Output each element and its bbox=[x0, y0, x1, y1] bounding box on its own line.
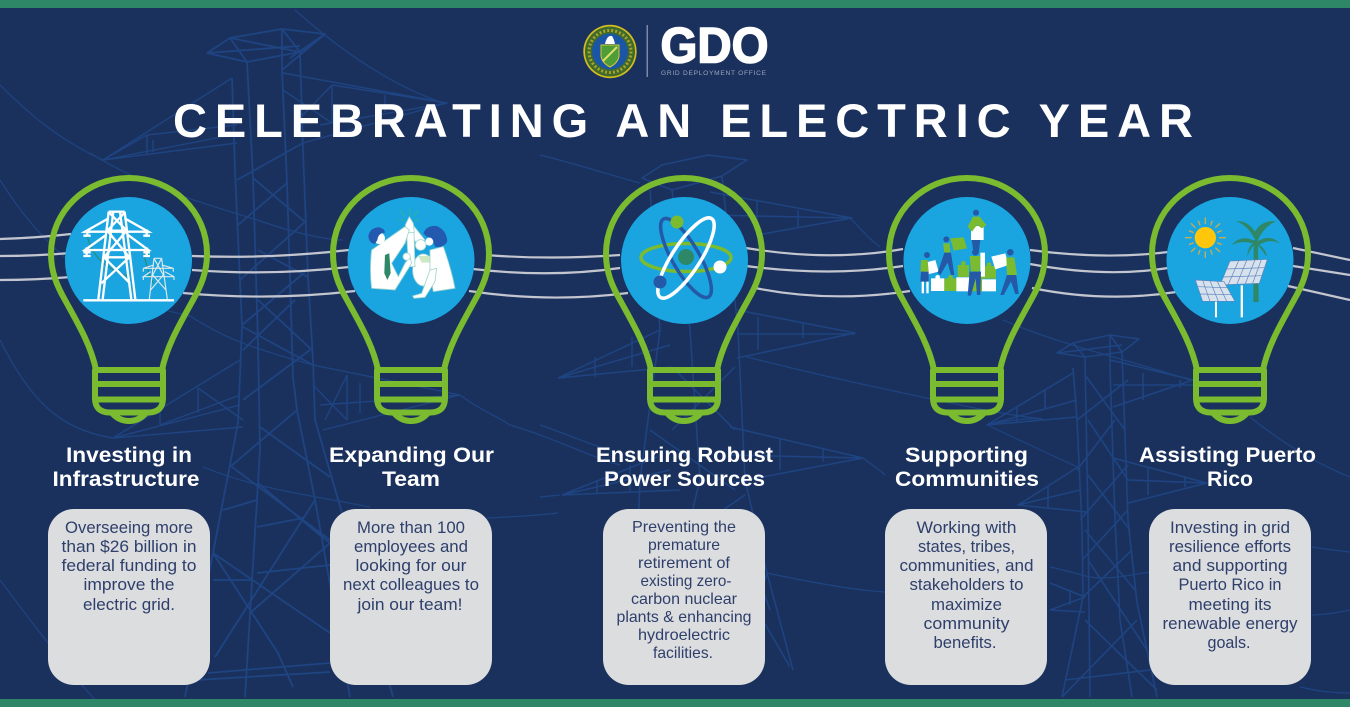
tower 1 bbox=[207, 29, 325, 62]
icon: sun, palm and solar panels bbox=[1166, 197, 1294, 324]
text card: communities, and bbox=[900, 557, 1034, 575]
text card: existing zero- bbox=[640, 573, 732, 590]
panel: ensuring robust power sources bbox=[596, 178, 773, 685]
text card: looking for our bbox=[356, 557, 467, 575]
heading: Assisting Puerto bbox=[1139, 444, 1316, 467]
heading bbox=[52, 444, 200, 491]
text card: goals. bbox=[1208, 634, 1250, 652]
panel: expanding our team bbox=[329, 178, 494, 685]
text card: benefits. bbox=[934, 634, 996, 652]
text card: carbon nuclear bbox=[631, 591, 737, 608]
heading bbox=[895, 444, 1039, 491]
text card: improve the bbox=[84, 576, 174, 594]
bottom green band bbox=[0, 699, 1350, 707]
logo bbox=[583, 18, 768, 78]
text card: maximize bbox=[931, 596, 1002, 614]
heading: Investing in bbox=[66, 444, 192, 467]
icon: light bulb bbox=[1152, 178, 1308, 421]
icon: colleagues high five bbox=[348, 197, 474, 324]
panel: assisting puerto rico bbox=[1139, 178, 1316, 685]
text card: plants & enhancing bbox=[616, 609, 752, 626]
heading bbox=[329, 444, 494, 491]
text card: hydroelectric bbox=[638, 627, 730, 644]
tower 3 bbox=[558, 155, 863, 670]
icon: people building puzzle bbox=[904, 197, 1030, 324]
heading: Communities bbox=[895, 468, 1039, 491]
icon: light bulb bbox=[51, 178, 207, 421]
heading: Expanding Our bbox=[329, 444, 494, 467]
GDO wordmark: GDO bbox=[660, 18, 768, 74]
divider bbox=[646, 25, 648, 77]
heading: Team bbox=[382, 468, 440, 491]
text card bbox=[603, 509, 765, 685]
text card: than $26 billion in bbox=[62, 538, 196, 556]
text card: facilities. bbox=[653, 645, 713, 662]
text card: employees and bbox=[354, 538, 468, 556]
text card bbox=[330, 509, 492, 685]
text card: community bbox=[924, 615, 1010, 633]
text card bbox=[48, 509, 210, 685]
panel: supporting communities bbox=[885, 178, 1047, 685]
icon: department seal bbox=[583, 25, 637, 78]
text card: resilience efforts bbox=[1169, 538, 1291, 556]
text card: next colleagues to bbox=[343, 576, 479, 594]
icon: light bulb bbox=[889, 178, 1045, 421]
text card: Overseeing more bbox=[65, 519, 193, 537]
text card: meeting its bbox=[1188, 596, 1272, 614]
office name: GRID DEPLOYMENT OFFICE bbox=[661, 70, 767, 77]
text card: federal funding to bbox=[62, 557, 196, 575]
text card bbox=[1149, 509, 1311, 685]
icon: atom bbox=[621, 197, 748, 324]
text card bbox=[885, 509, 1047, 685]
text card: More than 100 bbox=[357, 519, 465, 537]
heading bbox=[596, 444, 773, 491]
tower 2 bbox=[987, 335, 1207, 697]
heading: Supporting bbox=[905, 444, 1028, 467]
text card: and supporting bbox=[1172, 557, 1288, 575]
top green band bbox=[0, 0, 1350, 8]
text card: stakeholders to bbox=[910, 576, 1024, 594]
text card: Preventing the bbox=[632, 519, 736, 536]
text card: states, tribes, bbox=[918, 538, 1015, 556]
text card: retirement of bbox=[638, 555, 731, 572]
icon: transmission towers bbox=[65, 197, 192, 324]
heading: Rico bbox=[1207, 468, 1253, 491]
icon: light bulb bbox=[606, 178, 762, 421]
power lines bbox=[0, 234, 1350, 300]
text card: join our team! bbox=[356, 596, 462, 614]
title: CELEBRATING AN ELECTRIC YEAR bbox=[173, 94, 1193, 147]
text card: renewable energy bbox=[1162, 615, 1298, 633]
text card: Puerto Rico in bbox=[1178, 576, 1282, 594]
text card: premature bbox=[648, 537, 720, 554]
heading: Infrastructure bbox=[52, 468, 200, 491]
text card: electric grid. bbox=[83, 596, 175, 614]
heading: Ensuring Robust bbox=[596, 444, 773, 467]
panel: investing in infrastructure bbox=[48, 178, 210, 685]
heading: Power Sources bbox=[604, 468, 765, 491]
icon: light bulb bbox=[333, 178, 489, 421]
heading bbox=[1139, 444, 1316, 491]
text card: Working with bbox=[916, 519, 1016, 537]
text card: Investing in grid bbox=[1170, 519, 1290, 537]
